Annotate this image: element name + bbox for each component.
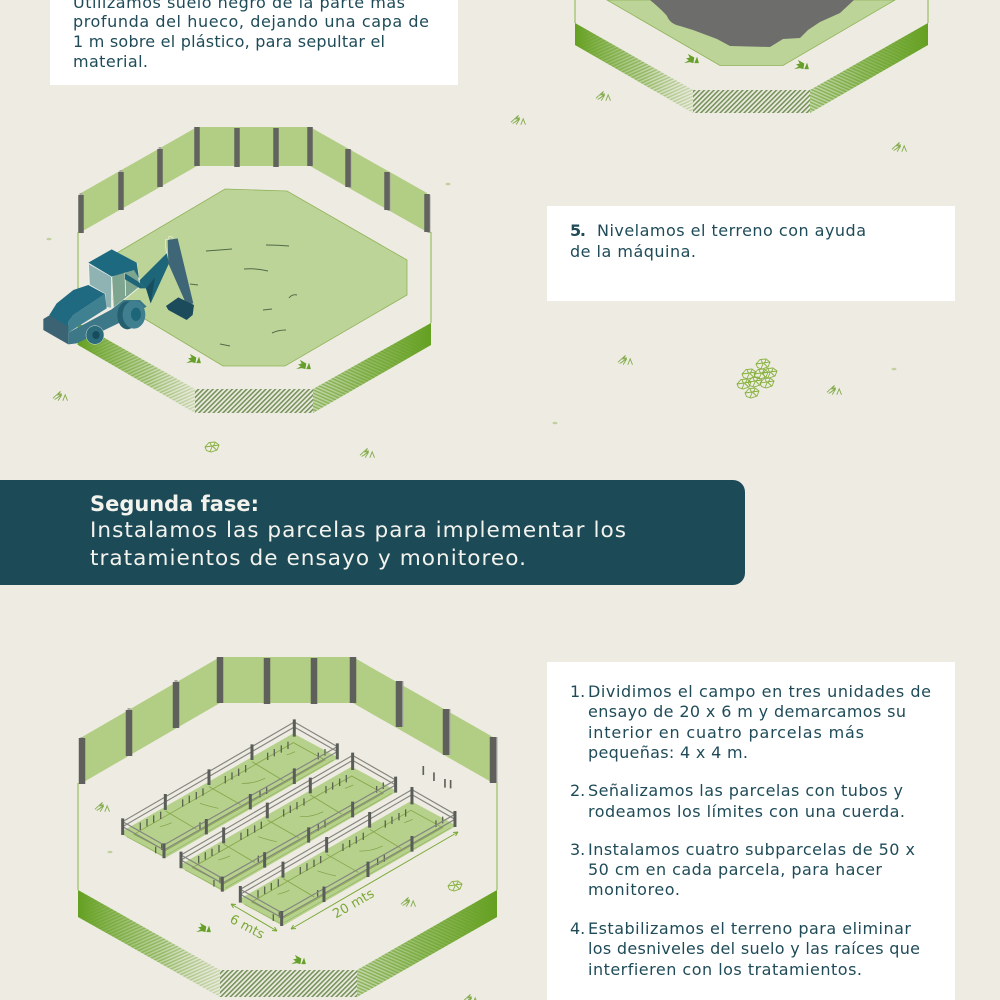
panel: step 4 text	[50, 0, 458, 85]
icon: backhoe tractor	[43, 236, 194, 344]
hatched base	[78, 323, 431, 413]
step 3: 50 cm en cada parcela, para hacer	[588, 860, 882, 879]
step 2: Señalizamos las parcelas con tubos y	[588, 781, 903, 800]
step 3: 3.	[570, 840, 585, 859]
levelled ground	[105, 189, 407, 366]
banner: second phase heading: Segunda fase:	[90, 492, 259, 517]
wall posts	[82, 657, 493, 784]
dimension: 6 mts	[227, 904, 277, 943]
floor outline	[78, 783, 497, 890]
black soil patch	[650, 0, 854, 47]
wall post highlights	[81, 147, 429, 233]
panel: step 5 text: Nivelamos el terreno con ayuda	[597, 221, 866, 240]
dimension: 20 mts: 20 mts	[330, 886, 377, 922]
dimension: 20 mts	[291, 832, 458, 929]
step 1: pequeñas: 4 x 4 m.	[588, 743, 748, 762]
step 1: 1.	[570, 682, 585, 701]
wall	[82, 657, 493, 783]
panel: step 4 text: profunda del hueco, dejando una capa de	[73, 12, 429, 31]
wall	[81, 127, 427, 232]
ground cracks	[190, 245, 297, 346]
banner: second phase heading: tratamientos de ensayo y monitoreo.	[90, 546, 526, 571]
panel: step 5 text: 5.	[570, 221, 586, 240]
dimension: 6 mts: 6 mts	[227, 912, 267, 943]
illustration: octagon with test plots	[78, 657, 497, 997]
step 4	[570, 919, 920, 979]
icon: leaf cluster	[737, 359, 777, 398]
step 1: interior en cuatro parcelas más	[588, 723, 864, 742]
step 4: los desniveles del suelo y las raíces que	[588, 939, 920, 958]
step 3	[570, 840, 915, 899]
panel: step 5 text	[547, 206, 955, 301]
step 1: ensayo de 20 x 6 m y demarcamos su	[588, 702, 906, 721]
step 4: Estabilizamos el terreno para eliminar	[588, 919, 911, 938]
hatched base	[78, 890, 497, 997]
plot units	[123, 719, 455, 926]
wall post highlights	[82, 680, 496, 783]
illustration: octagon levelled by machine	[43, 127, 431, 413]
panel: step 4 text: 1 m sobre el plástico, para sepultar el	[73, 32, 385, 51]
hatched base	[575, 23, 928, 113]
banner: second phase heading: Instalamos las parcelas para implementar los	[90, 518, 626, 543]
panel: step 4 text: material.	[73, 52, 148, 71]
banner: second phase heading	[0, 480, 745, 585]
step 2	[570, 781, 905, 821]
step 4: interfieren con los tratamientos.	[588, 960, 862, 979]
step 2: 2.	[570, 781, 585, 800]
step 2: rodeamos los límites con una cuerda.	[588, 802, 905, 821]
illustration: octagon with black soil	[575, 0, 928, 113]
step 1: Dividimos el campo en tres unidades de	[588, 682, 931, 701]
step 3: Instalamos cuatro subparcelas de 50 x	[588, 840, 915, 859]
floor outline	[78, 232, 431, 345]
panel: step 5 text: de la máquina.	[570, 242, 696, 261]
step 4: 4.	[570, 919, 585, 938]
wall posts	[81, 127, 427, 233]
step 3: monitoreo.	[588, 880, 680, 899]
panel: phase two steps	[547, 662, 955, 1000]
step 1	[570, 682, 931, 762]
